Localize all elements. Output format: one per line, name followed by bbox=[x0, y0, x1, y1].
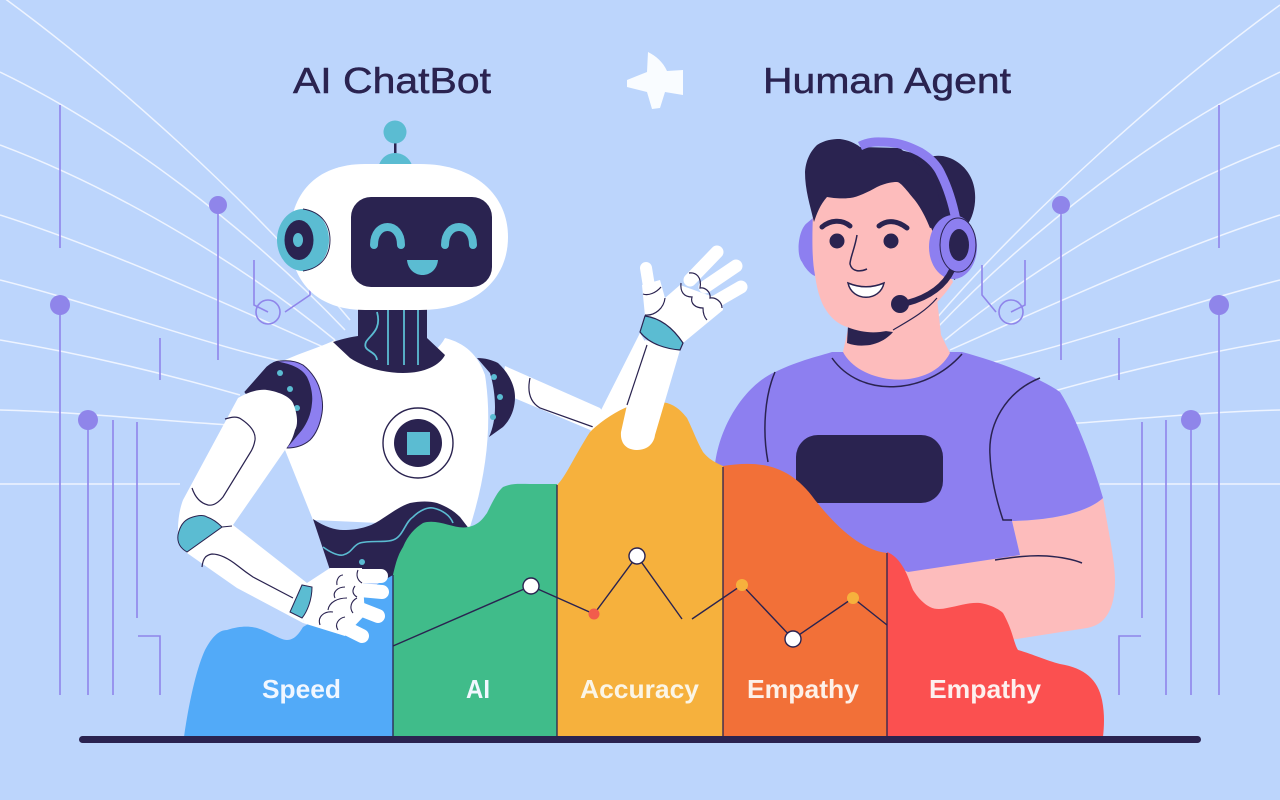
headset band bbox=[860, 142, 956, 220]
icon: robot forearm tube bbox=[621, 340, 680, 450]
segment: Speed bbox=[184, 575, 393, 737]
collar line bbox=[832, 354, 962, 387]
segment: AI: AI bbox=[466, 674, 490, 704]
arm crease bbox=[995, 556, 1082, 563]
smile bbox=[848, 283, 884, 297]
baseline bbox=[79, 736, 1201, 743]
chart: wavy area segments bbox=[79, 403, 1201, 743]
icon: robot wrist band left bbox=[290, 585, 312, 618]
right shoulder bbox=[477, 358, 515, 437]
figure: human agent bbox=[714, 139, 1115, 640]
trend line bbox=[393, 548, 887, 647]
lower body bbox=[313, 502, 470, 580]
neck shadow bbox=[847, 326, 893, 346]
segment: AI bbox=[393, 484, 557, 737]
icon: robot raised forearm bbox=[590, 333, 647, 432]
arm bbox=[900, 498, 1115, 640]
back hair bbox=[900, 150, 975, 280]
segment: Accuracy: Accuracy bbox=[580, 674, 700, 704]
chest button bbox=[383, 408, 453, 478]
microphone bbox=[891, 270, 952, 330]
segment: Empathy 2: Empathy bbox=[929, 674, 1042, 704]
chest badge bbox=[796, 435, 943, 503]
segment: Empathy bbox=[723, 464, 887, 737]
front hair bbox=[805, 139, 945, 228]
segment: Empathy 2 bbox=[887, 552, 1104, 737]
left arm bbox=[178, 390, 307, 623]
shirt seams bbox=[765, 372, 1040, 520]
icon: robot resting hand bbox=[303, 568, 382, 636]
face bbox=[812, 180, 953, 332]
neck bbox=[843, 298, 950, 380]
segment: Accuracy bbox=[557, 403, 723, 737]
eyes bbox=[830, 234, 898, 248]
upper right arm bbox=[500, 366, 625, 440]
segment: Empathy: Empathy bbox=[747, 674, 860, 704]
t-shirt bbox=[714, 352, 1103, 572]
left ear cup bbox=[799, 218, 815, 276]
head bbox=[277, 164, 508, 310]
headset ear cup bbox=[929, 215, 977, 279]
neck and collar bbox=[333, 305, 445, 373]
figure: robot bbox=[178, 120, 625, 623]
icon: robot raised hand bbox=[642, 252, 741, 343]
segment: Speed: Speed bbox=[262, 674, 341, 704]
icon: white sparkle bbox=[627, 52, 683, 109]
eyebrows bbox=[822, 221, 907, 228]
antenna bbox=[379, 120, 412, 165]
left shoulder bbox=[245, 361, 323, 448]
forearm seam bbox=[627, 345, 647, 405]
title: Human Agent: Human Agent bbox=[763, 60, 1011, 101]
torso bbox=[270, 338, 488, 527]
title: AI ChatBot: AI ChatBot bbox=[293, 60, 491, 101]
nose bbox=[850, 235, 867, 271]
icon: robot wrist band right bbox=[640, 316, 683, 350]
